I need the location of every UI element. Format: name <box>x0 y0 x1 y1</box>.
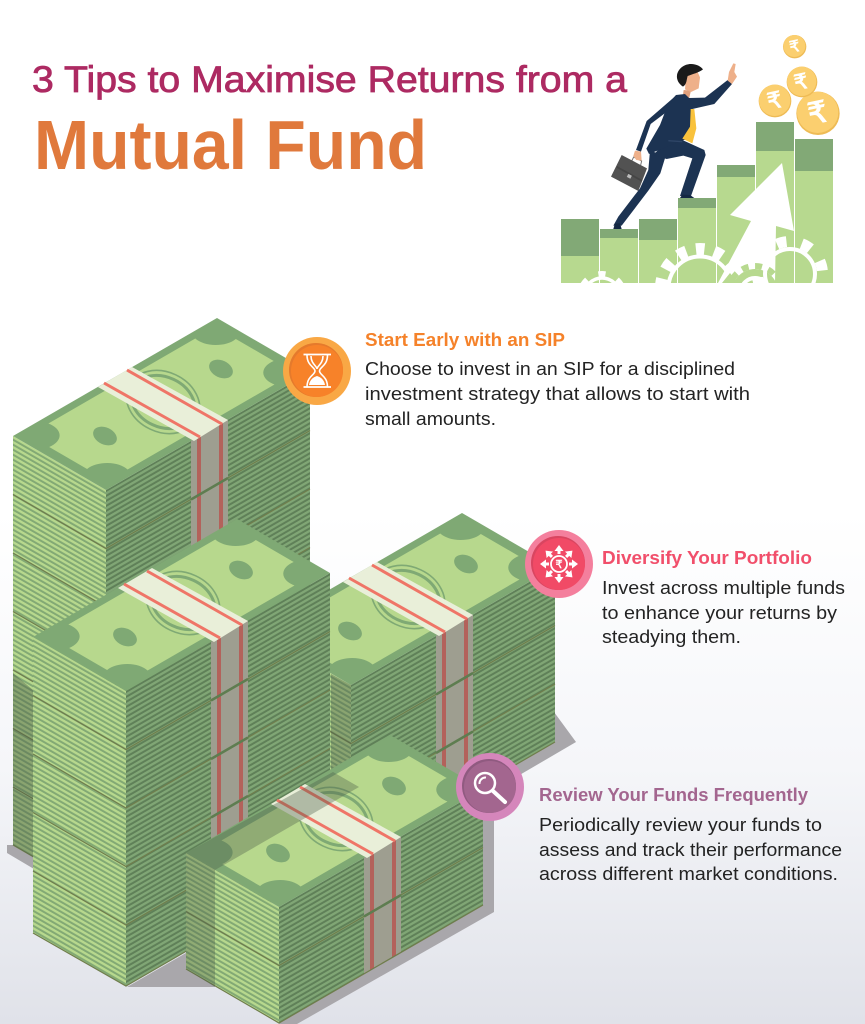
jacket and raised arm <box>646 80 732 154</box>
body text: to enhance your returns by <box>602 603 837 623</box>
stack 1: back left <box>13 318 310 899</box>
title: Mutual Fund: Mutual Fund <box>34 106 427 184</box>
body text <box>365 359 750 429</box>
heading: Start Early with an SIP <box>365 329 565 350</box>
back arm and hand <box>636 95 677 152</box>
cash stacks illustration <box>7 318 576 1024</box>
body text: steadying them. <box>602 627 741 647</box>
ground shadows <box>7 700 576 1024</box>
title line: 3 Tips to Maximise Returns from a <box>32 59 627 100</box>
coins: ₹ <box>792 69 810 95</box>
body text: Invest across multiple funds <box>602 578 845 598</box>
back leg <box>613 151 666 226</box>
body text: assess and track their performance <box>539 840 842 860</box>
stack 3: back right <box>258 513 555 860</box>
white gears and arrow <box>580 163 828 283</box>
coins: ₹ <box>788 38 802 57</box>
coins: ₹ <box>805 95 830 132</box>
body text: investment strategy that allows to start with <box>365 384 750 404</box>
body text <box>539 815 842 884</box>
body text: Periodically review your funds to <box>539 815 822 835</box>
icon: hourglass <box>283 337 351 405</box>
stack 2: middle tall <box>33 519 330 986</box>
body text: across different market conditions. <box>539 864 838 884</box>
illustration: rising bars with businessman and coins <box>561 35 840 283</box>
stack 4: front low <box>186 735 483 1023</box>
tip 1 <box>283 329 750 429</box>
bar chart columns <box>561 122 833 283</box>
front leg <box>653 140 706 196</box>
heading: Review Your Funds Frequently <box>539 784 809 805</box>
shadow cast on front stack <box>186 772 359 987</box>
body text <box>602 578 845 647</box>
icon: diversify arrows <box>525 530 593 598</box>
icon: magnifying glass <box>456 753 524 821</box>
raised hand <box>728 63 737 84</box>
businessman with briefcase <box>611 63 737 229</box>
icon: diversify arrows: ₹ <box>556 559 562 571</box>
coins <box>759 35 840 135</box>
tie <box>682 109 696 143</box>
body text: small amounts. <box>365 409 496 429</box>
tip 2 <box>525 530 845 647</box>
coins: ₹ <box>765 86 785 115</box>
tip 3 <box>456 753 842 884</box>
heading: Diversify Your Portfolio <box>602 547 812 568</box>
body text: Choose to invest in an SIP for a disciplined <box>365 359 735 379</box>
neck and head <box>683 90 691 99</box>
briefcase <box>611 155 647 191</box>
